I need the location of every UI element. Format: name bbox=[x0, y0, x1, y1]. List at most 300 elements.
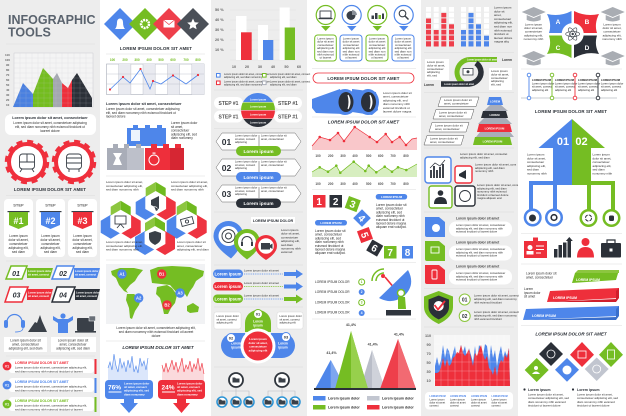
text block: elit, sed diam nonummy nibh euismod tincidunt ut bbox=[106, 111, 176, 115]
text block: right: Lorem ipsum dolor sit bbox=[376, 203, 406, 207]
bar: 3D blue: LOREM IPSUM bbox=[532, 314, 556, 318]
diagram: ribbon with money: Lorem bbox=[502, 58, 512, 62]
pin: pie bbox=[342, 6, 361, 31]
chart: grouped bar chart: 40 bbox=[271, 65, 275, 69]
text block: diam nonummy nibh bbox=[383, 102, 410, 106]
diagram: petal circle: Lorem bbox=[231, 342, 241, 346]
box 3: sed diam non bbox=[369, 49, 386, 53]
chart: red percentage: 24% bbox=[162, 384, 175, 392]
box 4: ut laoreet bbox=[397, 56, 409, 60]
icon: binoculars bbox=[312, 89, 379, 115]
panel: step pills and ball: STEP #1 bbox=[219, 114, 239, 120]
text block: amet, consectetuer bbox=[526, 275, 554, 279]
text block: right: LOREM IPSUM bbox=[381, 195, 403, 199]
text block: adipiscing elit, bbox=[603, 33, 622, 37]
chart: layered area: 90 bbox=[426, 343, 431, 347]
diagram: stacked pyramid: LOREM bbox=[490, 100, 501, 104]
diagram: petal circle: Lorem bbox=[253, 320, 263, 324]
text block: bullet right: Lorem ipsum dolor sit amet, bbox=[577, 392, 613, 396]
tag 04: Lorem ipsum dolor bbox=[76, 292, 100, 294]
bar: 3D red: LOREM IPSUM bbox=[553, 296, 577, 300]
list row green: #1 bbox=[5, 402, 10, 406]
chart: red area: 800 bbox=[403, 154, 409, 158]
chart: layered area bbox=[425, 334, 510, 386]
text block: consectetuer adipiscing elit, bbox=[106, 184, 143, 188]
box 1: ut laoreet bbox=[320, 56, 332, 60]
step 3: adipiscing elit, bbox=[72, 246, 93, 250]
panel: hexagon row 02: Lorem ipsum dolor sit bbox=[261, 160, 287, 164]
panel: hexagon row 02: Lorem ipsum dolor bbox=[235, 160, 257, 164]
legend: numbered dots: 3 bbox=[361, 301, 363, 305]
step 1: adipiscing elit, bbox=[8, 246, 29, 250]
diagram: quadrant ABCD bbox=[547, 11, 599, 58]
chart: grouped bar chart: 50 % bbox=[215, 8, 224, 12]
step 1: dolor sit amet, bbox=[8, 238, 29, 242]
icon: megaphone tile bbox=[455, 166, 472, 183]
text block: Lorem ipsum bbox=[494, 6, 511, 10]
chart: green area: 200 bbox=[328, 182, 334, 186]
text block: dolor sit amet, bbox=[524, 26, 543, 30]
box 3 bbox=[366, 35, 388, 61]
panel: location pins bbox=[316, 6, 413, 31]
icon: laptop bbox=[75, 316, 96, 333]
diagram: timeline: sit amet, consect bbox=[601, 85, 621, 89]
step 3: dolor sit amet, bbox=[72, 238, 93, 242]
step 3: STEP bbox=[77, 202, 88, 208]
text block: Lorem ipsum bbox=[592, 152, 610, 156]
panel: hexagon row 01 bbox=[216, 133, 301, 156]
panel: numbered squares: 5 bbox=[358, 231, 370, 240]
chart: red percentage: adipiscing elit, sed bbox=[177, 389, 202, 393]
diagram: folder tree left bbox=[217, 373, 254, 407]
list: 02: adipiscing elit, sed diam nonummy bbox=[474, 313, 517, 317]
heading: LOREM IPSUM DOLOR SIT AMET bbox=[535, 109, 607, 114]
diagram: timeline: adipiscing elit bbox=[532, 88, 548, 92]
heading: LOREM IPSUM DOLOR SIT AMET bbox=[328, 120, 400, 124]
text block: magna aliquam erat bbox=[477, 196, 502, 200]
step 1: STEP bbox=[13, 202, 24, 208]
diagram: folder tree right bbox=[263, 373, 300, 407]
chart: green area: 700 bbox=[390, 182, 396, 186]
panel: hexagon row 01: Lorem ipsum dolor sit bbox=[261, 134, 287, 138]
text block: chart caption: elit, sed diam nonummy nibh euismod tincidunt ut bbox=[15, 125, 85, 129]
chart: triangle peaks: 41,4% bbox=[368, 342, 379, 346]
chart legend bbox=[313, 396, 414, 410]
tag 01: 01 bbox=[12, 271, 20, 278]
panel: step pills and ball: STEP #1 bbox=[219, 101, 239, 107]
chart legend: Lorem ipsum dolor bbox=[382, 396, 414, 400]
text block: icon captions: Lorem ipsum dolor sit bbox=[10, 338, 41, 342]
icon: shield bbox=[149, 231, 161, 245]
heading: LOREM IPSUM DOLOR SIT AMET bbox=[535, 332, 608, 336]
icon: megaphone bbox=[151, 196, 159, 211]
icon: headset bbox=[4, 314, 25, 332]
chart: mountain area chart: 30 bbox=[6, 93, 10, 97]
diamond: notes bbox=[599, 342, 623, 367]
box 2: dolor sit amet bbox=[343, 40, 360, 44]
box 2: adipiscing elit bbox=[343, 46, 360, 50]
panel: chart legend box: consect bbox=[450, 404, 459, 408]
list row blue: sed diam nonummy nibh euismod tincidunt ut laoreet bbox=[15, 388, 83, 392]
text block: laoreet dolore magna bbox=[383, 110, 412, 114]
text block: sed diam nonummy nibh bbox=[171, 188, 204, 192]
list row red: LOREM IPSUM DOLOR SIT AMET bbox=[15, 361, 70, 365]
panel: numbered squares: 6 bbox=[369, 243, 380, 255]
chart: triangle peaks: 41,4% bbox=[326, 351, 337, 355]
text block: Lorem ipsum dolor sit amet, consectet bbox=[460, 152, 507, 156]
pin B1: B1 bbox=[159, 272, 165, 276]
text block: Lorem ipsum dolor sit amet, cons bbox=[475, 162, 516, 166]
text block: diam nonummy bbox=[171, 136, 193, 140]
heading: red pill bbox=[313, 73, 414, 83]
text block: tincidunt ut bbox=[494, 32, 509, 36]
panel: parallelogram boxes: Lorem ipsum dolor sit bbox=[435, 124, 463, 128]
chart: mountain area chart: 80 bbox=[6, 68, 10, 72]
diagram: ribbon with money: dolor sit amet, bbox=[427, 63, 445, 67]
box 4: adipiscing elit bbox=[395, 46, 412, 50]
step 2: Lorem ipsum bbox=[41, 234, 60, 238]
text block: right note: Lorem ipsum dolor bbox=[280, 315, 302, 318]
box 3: adipiscing elit bbox=[369, 46, 386, 50]
icon: building blocks bbox=[107, 125, 184, 170]
text block: nonummy nibh bbox=[592, 172, 613, 176]
chart: red percentage: Lorem ipsum dolor bbox=[177, 382, 202, 386]
panel: numbered squares: 4 bbox=[355, 213, 367, 225]
heading bbox=[251, 217, 295, 224]
diagram: up arrow tree: 01 bbox=[557, 136, 569, 148]
text block: left bbox=[315, 220, 347, 255]
chart: line chart: 500 bbox=[158, 58, 164, 62]
panel: parallelogram boxes: Lorem ipsum dolor sit bbox=[439, 110, 467, 114]
panel: chart legend box: Lorem ipsum bbox=[430, 398, 444, 402]
text block: Lorem ipsum bbox=[281, 228, 298, 232]
chart: mountain area chart: 60 bbox=[6, 78, 10, 82]
chart: line chart bbox=[106, 58, 204, 94]
tag 03 bbox=[5, 287, 53, 302]
legend: numbered dots: 4 bbox=[361, 311, 363, 315]
diagram: timeline: Lorem ipsum dolor bbox=[555, 81, 577, 85]
text block: Lorem ipsum dolor bbox=[171, 121, 197, 125]
text block: adipiscing elit, bbox=[527, 164, 546, 168]
text block: left note: sit amet, consect bbox=[216, 317, 237, 321]
panel: diamond icons bbox=[525, 342, 623, 382]
chart: grouped bar chart: 30 % bbox=[215, 28, 224, 32]
chart: green area: 100 bbox=[315, 182, 321, 186]
icon: id card bbox=[524, 238, 547, 258]
box 1 bbox=[315, 35, 336, 61]
chart: block bars bbox=[425, 7, 490, 46]
chart: triangle peaks: 41,4% bbox=[346, 323, 357, 327]
diagram: petal circle: Lorem bbox=[278, 342, 288, 346]
step 2: consectetuer bbox=[41, 242, 61, 246]
diagram: ribbon with money bbox=[424, 58, 512, 90]
chart: green area: 400 bbox=[352, 182, 358, 186]
diagram: petal circle: ipsum bbox=[278, 346, 288, 350]
text block: Lorem ipsum dolor sit bbox=[383, 91, 412, 95]
panel: parallelogram boxes: amet, consectetuer bbox=[435, 127, 460, 131]
chart: grouped bar chart: 20 bbox=[245, 65, 249, 69]
arrow row green: Lorem ipsum bbox=[215, 296, 242, 302]
panel: numbered squares bbox=[313, 195, 413, 259]
text block: right: amet, consectetuer bbox=[376, 207, 404, 211]
icon: mountain bbox=[28, 315, 47, 332]
pin: target bbox=[214, 221, 244, 258]
chart: red area: 600 bbox=[378, 154, 384, 158]
panel: device tab green: Lorem ipsum dolor sit amet bbox=[456, 240, 500, 244]
step 3: sed diam bbox=[76, 250, 89, 254]
title: INFOGRAPHIC bbox=[8, 13, 96, 27]
text block: chart caption: Lorem ipsum dolor sit amet, consectetuer bbox=[12, 116, 88, 120]
icon: business person bbox=[577, 238, 594, 258]
pin: laptop bbox=[316, 6, 335, 31]
text block: tincidunt ut laoreet dolore bbox=[477, 193, 509, 197]
box 2: ut laoreet bbox=[345, 56, 357, 60]
panel: device tab red: Lorem ipsum dolor sit amet bbox=[456, 264, 500, 268]
panel: parallelogram boxes: Lorem ipsum dolor sit bbox=[444, 98, 472, 102]
chart: red percentage: sit amet, consect bbox=[177, 385, 200, 389]
list: 02: Lorem ipsum dolor sit amet, consect bbox=[474, 310, 519, 314]
chart legend: Lorem ipsum dolor sit amet, consectetuer bbox=[224, 73, 270, 76]
legend: numbered dots: 1 bbox=[361, 280, 363, 284]
text block: sed diam bbox=[527, 168, 540, 172]
text block: Lorem ipsum bbox=[525, 22, 542, 26]
diagram: petal circle: ipsum bbox=[231, 346, 241, 350]
box 2 bbox=[340, 35, 362, 61]
chart: triangle peaks bbox=[314, 323, 416, 390]
text block: consectetuer bbox=[171, 129, 190, 133]
diagram: timeline bbox=[521, 73, 623, 100]
chart: mountain area chart: 90 bbox=[6, 63, 10, 67]
tag 01: Lorem ipsum dolor bbox=[28, 270, 52, 273]
arrow row green: Lorem ipsum dolor sit amet bbox=[244, 294, 279, 298]
list: 02: 02 bbox=[462, 314, 468, 320]
heading: LOREM IPSUM DOLOR SIT AMET bbox=[120, 46, 192, 51]
chart: blue percentage: 76% bbox=[108, 384, 121, 392]
text block: sit amet, bbox=[171, 125, 183, 129]
text block: map caption: sed diam nonummy nibh euismod tincidunt ut laoreet bbox=[119, 330, 193, 334]
text block: amet, consectetuer bbox=[177, 244, 203, 248]
diagram: quadrant ABCD: B bbox=[585, 19, 590, 26]
panel: hexagon row 01: 01 bbox=[222, 137, 231, 147]
chart: blue percentage: sit amet, consect bbox=[124, 385, 147, 389]
panel: step pills and ball: Lorem ipsum bbox=[250, 120, 267, 124]
panel: numbered squares: 1 bbox=[316, 197, 322, 208]
text block: sed diam nonummy nibh bbox=[106, 188, 139, 192]
badge 01: 01 bbox=[256, 312, 261, 316]
pin A1: A1 bbox=[119, 272, 125, 276]
step 1: #1 bbox=[13, 216, 24, 226]
panel: hexagon row 03: Lorem ipsum dolor sit bbox=[261, 186, 287, 190]
pin: video bbox=[255, 235, 277, 260]
list: 02 bbox=[459, 310, 519, 322]
text block: chart caption bbox=[5, 114, 96, 135]
panel: arrow rows bbox=[213, 268, 303, 304]
diagram: petal circle: ipsum bbox=[253, 324, 263, 328]
text block: right: diam nonummy nibh bbox=[376, 214, 405, 218]
diamond: pie bbox=[555, 358, 579, 382]
panel: device tab blue: Lorem ipsum dolor sit amet bbox=[456, 216, 500, 220]
step 2: #2 bbox=[45, 216, 56, 226]
diagram: stacked pyramid: LOREM bbox=[489, 113, 500, 117]
list row green bbox=[3, 397, 97, 412]
panel: hexagon row 02: Lorem ipsum bbox=[243, 175, 274, 181]
tag 01: sit amet, consect bbox=[28, 272, 49, 276]
text block: left note: Lorem ipsum dolor bbox=[216, 315, 239, 318]
panel: chart legend box: LOREM IPSUM bbox=[492, 396, 508, 398]
text block: magna aliq bbox=[494, 40, 509, 44]
text block: dolor sit amet, bbox=[603, 26, 622, 30]
diagram: quadrant ABCD: C bbox=[556, 45, 561, 52]
text block: consectetuer bbox=[525, 30, 542, 34]
text block: bullet left: Lorem ipsum dolor sit amet, bbox=[528, 392, 564, 396]
diamond: user bbox=[525, 358, 549, 382]
arrow row red: Lorem ipsum bbox=[215, 284, 242, 289]
text block: sed diam non bbox=[494, 24, 512, 28]
chart legend: adipiscing elit, sed diam nonummy bbox=[224, 84, 263, 86]
panel: hexagon row 02 bbox=[216, 159, 301, 182]
panel: hexagon row 01: sit amet, consect bbox=[235, 137, 255, 141]
panel: step pills and ball: Lorem ipsum bbox=[250, 112, 267, 116]
panel: isometric hexagons bbox=[101, 182, 207, 255]
panel: hexagon row 03: Lorem ipsum bbox=[243, 201, 274, 207]
panel: step pills and ball bbox=[214, 93, 302, 128]
chart: mountain area chart: 70 bbox=[6, 73, 10, 77]
icon: presentation board bbox=[115, 216, 126, 228]
chart: mountain area chart: 20 bbox=[6, 98, 10, 102]
chart: green area: 300 bbox=[340, 182, 346, 186]
chart: grouped bar chart: 20 % bbox=[215, 38, 224, 42]
diagram: up arrow tree bbox=[524, 119, 620, 227]
panel: chart legend box: LOREM IPSUM bbox=[471, 396, 487, 398]
text block: bullet right: tincidunt ut laoreet dolore bbox=[577, 404, 610, 408]
text block: Lorem ipsum dolor sit amet, cons bbox=[477, 183, 518, 187]
chart: grouped bar chart: 50 bbox=[284, 65, 289, 69]
chart: mountain area chart: 40 bbox=[6, 88, 10, 92]
chart: red area bbox=[312, 126, 417, 158]
chart: mountain area chart: 100 bbox=[5, 58, 10, 62]
text block: left: LOREM IPSUM bbox=[320, 221, 342, 225]
icon: briefcase bbox=[601, 240, 621, 258]
diagram: timeline: sit amet, consect bbox=[532, 85, 552, 89]
badge 03: 03 bbox=[284, 334, 289, 340]
text block: bullet right: diam nonummy nibh euismod bbox=[577, 400, 615, 404]
tag 02: 02 bbox=[59, 271, 67, 278]
heading: LOREM IPSUM DOLOR SIT AMET bbox=[122, 345, 195, 350]
text block: bullet left: tincidunt ut laoreet dolore bbox=[528, 404, 561, 408]
text block: right: adipiscing elit, sed bbox=[376, 210, 402, 214]
step 1: sed diam bbox=[12, 250, 25, 254]
panel: chart legend box: dolor sit amet bbox=[450, 400, 466, 404]
pin A3: A3 bbox=[177, 290, 183, 296]
chart: green area bbox=[312, 160, 417, 186]
legend: numbered dots bbox=[315, 279, 365, 316]
chart: red area: 200 bbox=[328, 154, 334, 158]
diagram: timeline: LOREM IPSUM bbox=[555, 78, 575, 82]
legend: numbered dots: LOREM IPSUM DOLOR bbox=[315, 310, 350, 314]
heading: red pill: LOREM IPSUM DOLOR SIT AMET bbox=[327, 76, 400, 81]
pin: headset bbox=[234, 229, 260, 260]
panel: device tab blue bbox=[425, 216, 512, 237]
box 4 bbox=[392, 35, 414, 61]
badge 02: 02 bbox=[229, 336, 234, 340]
text block: amet, bbox=[494, 13, 502, 17]
text block: nonummy nibh bbox=[602, 37, 622, 41]
text block: sed diam nonummy nibh bbox=[106, 248, 139, 252]
panel: device tab red: euismod tincidunt ut laoreet dolore bbox=[456, 278, 498, 282]
box 2: nibh euismod bbox=[343, 52, 360, 56]
text block: euismod tincidunt ut bbox=[383, 106, 410, 110]
panel: chart legend box: dolor sit amet bbox=[471, 400, 487, 404]
diagram: quadrant ABCD: D bbox=[585, 45, 590, 52]
icon: graduation hats bbox=[522, 7, 625, 66]
text block: adipiscing elit, bbox=[592, 164, 612, 168]
chart: blue percentage bbox=[105, 354, 153, 413]
diamond: gray bbox=[585, 358, 609, 381]
text block: nonummy nibh bbox=[524, 37, 544, 41]
chart: line chart: 600 bbox=[170, 58, 176, 62]
step 3: #3 bbox=[77, 216, 88, 226]
box 3: Lorem ipsum bbox=[369, 36, 385, 40]
panel: numbered squares: 7 bbox=[387, 248, 393, 259]
node 3 bbox=[580, 209, 598, 227]
chart: layered area: 10 bbox=[426, 379, 431, 383]
arrow row red: Lorem ipsum dolor sit amet bbox=[244, 281, 279, 285]
text block: Lorem ipsum bbox=[527, 152, 544, 156]
text block: map caption: dolore bbox=[152, 334, 161, 338]
text block: Lorem ipsum dolor sit amet, bbox=[106, 180, 143, 184]
list: 01: Lorem ipsum dolor sit amet, consect bbox=[474, 294, 519, 298]
tag 02: sit amet, consect bbox=[75, 272, 96, 276]
diagram: timeline: Lorem ipsum dolor bbox=[532, 81, 554, 85]
text block: bullet left: consectetuer adipiscing elit, sed bbox=[528, 396, 569, 400]
diagram: timeline: Lorem ipsum dolor bbox=[578, 81, 600, 85]
text block: icon captions: amet, consectetuer bbox=[59, 342, 87, 346]
step 3: Lorem ipsum bbox=[73, 234, 92, 238]
diagram: ribbon with money: adipiscing bbox=[427, 70, 440, 74]
text block: right note bbox=[277, 312, 303, 329]
chart: line chart: 300 bbox=[134, 58, 140, 62]
icon: person bbox=[53, 313, 73, 333]
tag 04: 04 bbox=[59, 292, 67, 300]
arrow row red bbox=[213, 281, 303, 291]
box 4: consectetuer bbox=[395, 43, 411, 47]
text block: left: laoreet dolore magna bbox=[315, 248, 345, 252]
chart legend: Lorem ipsum dolor sit amet, consectetuer bbox=[224, 80, 270, 84]
text block: bullet right bbox=[572, 388, 618, 408]
panel: device tab green: adipiscing elit, sed diam nonummy nibh bbox=[456, 250, 503, 254]
chart legend: Lorem ipsum dolor bbox=[328, 396, 360, 400]
list row green: LOREM IPSUM DOLOR SIT AMET bbox=[15, 399, 70, 403]
chart legend: Lorem ipsum dolor sit amet, consect bbox=[270, 80, 310, 84]
chart: grouped bar chart: 10 % bbox=[215, 48, 224, 52]
text block: dolor sit bbox=[494, 9, 505, 13]
chart: red area: 700 bbox=[390, 154, 396, 158]
bar: 3D green bbox=[572, 270, 619, 283]
tag 03: sit amet, consect bbox=[28, 294, 49, 298]
text block: sit amet bbox=[524, 295, 535, 299]
text block: amet, consectetuer bbox=[383, 95, 409, 99]
title: TOOLS bbox=[8, 26, 51, 40]
list: 01: nibh euismod tincidunt bbox=[474, 300, 502, 304]
box 3: nibh euismod bbox=[369, 52, 386, 56]
chart: green area: 600 bbox=[378, 182, 384, 186]
text block: icon captions: Lorem ipsum dolor sit bbox=[58, 338, 88, 342]
panel: device tab green: euismod tincidunt ut laoreet dolore bbox=[456, 254, 498, 258]
diagram: timeline: sit amet, consect bbox=[555, 85, 575, 89]
diagram: timeline: adipiscing elit bbox=[578, 88, 594, 92]
diamond: coin bbox=[539, 342, 563, 366]
text block: adipiscing elit, bbox=[524, 33, 543, 37]
